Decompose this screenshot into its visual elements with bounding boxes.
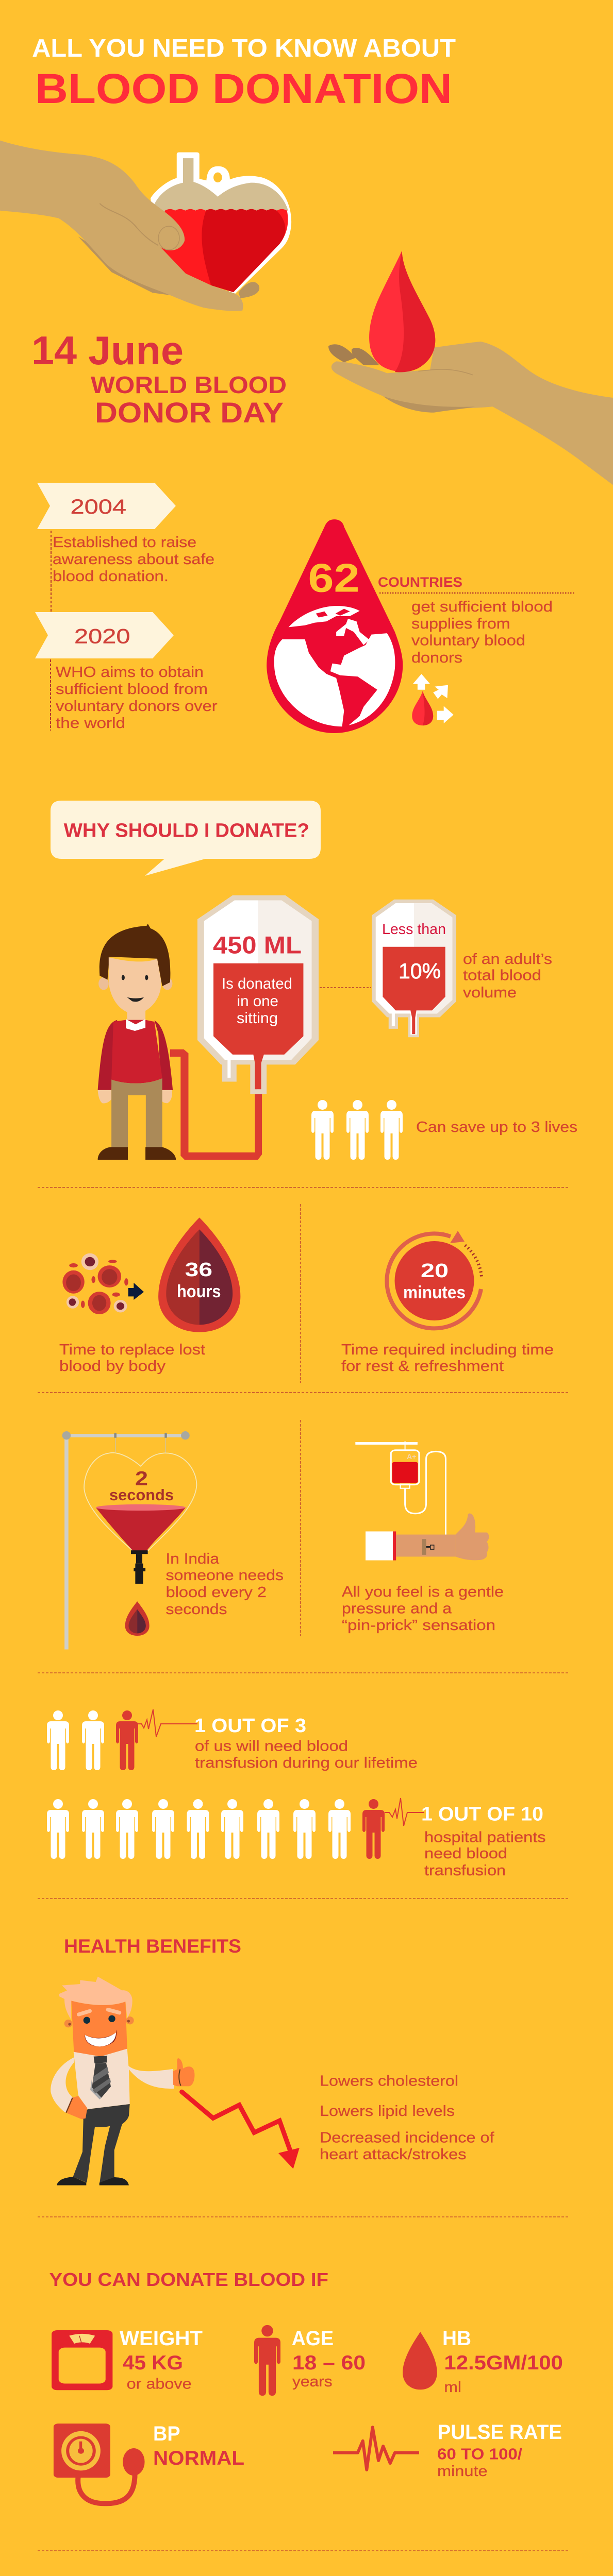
criterion: pulse rate: 60 TO 100/ (437, 2445, 522, 2463)
stat: 1 out of 10: transfusion (424, 1862, 506, 1879)
list: health benefits: heart attack/strokes (320, 2146, 467, 2163)
timeline: 2020 (35, 612, 218, 732)
icon: hb drop (403, 2332, 437, 2389)
criterion: age: 18 – 60 (292, 2352, 366, 2374)
stat: 1 out of 3: 1 OUT OF 3 (194, 1715, 306, 1737)
criterion: hb (442, 2327, 563, 2396)
date heading: WORLD BLOOD (91, 371, 287, 398)
icon: drop with arrows (412, 674, 454, 725)
criterion: hb: ml (444, 2379, 461, 2396)
text: time to replace lost blood: blood by body (59, 1358, 166, 1375)
blood bag: 450 ml: in one (237, 993, 278, 1010)
text: in India someone needs blood: someone needs (166, 1567, 284, 1584)
illustration: hand holding heart-shaped blood bag (0, 141, 291, 311)
stat: 62 countries: get sufficient blood (411, 599, 553, 615)
timeline: 2004: awareness about safe (53, 551, 214, 568)
stat: 1 out of 3: transfusion during our lifetime (195, 1755, 418, 1771)
timeline: 2004: 2004 (70, 496, 126, 518)
list: health benefits: Lowers lipid levels (320, 2103, 455, 2120)
date heading (31, 328, 287, 429)
stat: 62 countries: donors (411, 650, 462, 666)
title: BLOOD DONATION (35, 65, 452, 112)
criterion: age: AGE (292, 2327, 334, 2350)
icon: three people (311, 1100, 403, 1160)
title: ALL YOU NEED TO KNOW ABOUT (32, 35, 456, 62)
text: of an adult's total blood volume: total blood (463, 968, 541, 984)
stat: 62 countries: 62 (308, 555, 360, 601)
date heading: 14 June (31, 328, 184, 373)
text: in India someone needs blood: seconds (166, 1601, 227, 1618)
illustration: donor man (98, 924, 176, 1160)
timeline: 2020: WHO aims to obtain (56, 664, 204, 681)
criterion: weight: 45 KG (123, 2352, 183, 2374)
icon: blood pressure monitor (54, 2424, 145, 2503)
list: health benefits: Decreased incidence of (320, 2130, 495, 2146)
tube connecting man and bag (170, 1049, 262, 1160)
icon row: 1 out of 3 people (47, 1709, 197, 1770)
icon: 20 minutes clock: minutes (403, 1283, 466, 1302)
illustration: arm with drip: A+ (407, 1452, 416, 1461)
criterion: pulse rate: PULSE RATE (438, 2421, 562, 2444)
blood bag: 450 ml: sitting (237, 1010, 278, 1027)
text: of an adult's total blood volume: of an adult’s (463, 951, 552, 968)
criterion: bp: BP (153, 2422, 180, 2445)
blood bag: less than 10%: Less than (382, 921, 446, 938)
timeline: 2004: Established to raise (53, 534, 196, 551)
text: in India someone needs blood: In India (166, 1551, 220, 1567)
connector between bags (320, 987, 371, 988)
illustration: open hand with blood drop (328, 251, 613, 485)
criterion: pulse rate: minute (437, 2463, 488, 2480)
text: time to replace lost blood (59, 1342, 205, 1375)
text: time required (341, 1342, 554, 1375)
criterion: bp: NORMAL (153, 2447, 244, 2469)
list: health benefits: Lowers cholesterol (320, 2073, 458, 2090)
blood bag: 450 ml: Is donated (222, 975, 292, 992)
stat: 1 out of 10: hospital patients (424, 1829, 546, 1845)
stat: 1 out of 3: of us will need blood (195, 1738, 348, 1755)
icon: 20 minutes clock (387, 1231, 482, 1328)
stat: 62 countries: COUNTRIES (378, 574, 462, 590)
text: all you feel: “pin-prick” sensation (342, 1617, 495, 1634)
illustration: IV stand with heart funnel (62, 1431, 196, 1650)
speech bubble: why should I donate: WHY SHOULD I DONATE? (64, 820, 309, 842)
criterion: hb: HB (442, 2327, 471, 2350)
stat: 1 out of 3 (194, 1715, 418, 1771)
icon: globe in blood drop (267, 519, 403, 733)
stat: 1 out of 10 (421, 1804, 546, 1879)
text: can save up to 3 lives: Can save up to 3 lives (416, 1119, 577, 1136)
criterion: pulse rate (437, 2421, 562, 2480)
text: all you feel: pressure and a (342, 1601, 452, 1617)
icon: blood cells with arrow (62, 1253, 144, 1314)
timeline: 2020: voluntary donors over (56, 698, 218, 715)
icon: downward zigzag arrow (182, 2092, 300, 2169)
stat: 62 countries: supplies from (411, 616, 510, 632)
icon row: 1 out of 10 people (47, 1798, 424, 1859)
criterion: weight: WEIGHT (120, 2327, 203, 2350)
blood bag: less than 10%: 10% (399, 959, 441, 983)
timeline: 2020: 2020 (74, 625, 130, 648)
text: time to replace lost blood: Time to replace lost (59, 1342, 205, 1358)
text: time required: Time required including time (341, 1342, 554, 1358)
criterion: bp (153, 2422, 244, 2469)
stat: 62 countries (308, 555, 574, 666)
speech bubble: why should I donate (51, 801, 321, 876)
text: in India someone needs blood (166, 1551, 284, 1618)
text: all you feel: All you feel is a gentle (342, 1584, 504, 1600)
date heading: DONOR DAY (95, 396, 284, 429)
dashed section dividers (38, 1188, 569, 2551)
timeline: 2020: the world (56, 715, 125, 732)
list: health benefits (320, 2073, 495, 2163)
icon: 36 hours drop (158, 1217, 240, 1332)
icon: 36 hours drop: hours (177, 1282, 221, 1301)
illustration: arm with drip (355, 1441, 489, 1561)
text: of an adult's total blood volume (463, 951, 552, 1001)
criterion: hb: 12.5GM/100 (444, 2352, 563, 2374)
criterion: weight (120, 2327, 203, 2393)
blood bag: 450 ml (197, 895, 319, 1094)
stat: 1 out of 10: need blood (424, 1845, 507, 1862)
icon: person age (254, 2325, 280, 2396)
timeline: 2004: blood donation. (53, 568, 169, 585)
criterion: age (292, 2327, 366, 2390)
icon: 36 hours drop: 36 (185, 1259, 212, 1281)
heading: health benefits: HEALTH BENEFITS (64, 1936, 241, 1957)
icon: weighing scale (52, 2330, 112, 2390)
icon: 20 minutes clock: 20 (421, 1260, 449, 1282)
text: all you feel (342, 1584, 504, 1634)
timeline: 2020: sufficient blood from (56, 681, 208, 698)
stat: 1 out of 10: 1 OUT OF 10 (421, 1804, 543, 1825)
icon: pulse line (333, 2427, 419, 2470)
title (32, 35, 456, 112)
text: time required: for rest & refreshment (341, 1358, 504, 1375)
illustration: IV stand with heart funnel: seconds (109, 1486, 174, 1504)
stat: 62 countries: voluntary blood (411, 633, 525, 649)
criterion: age: years (292, 2374, 333, 2390)
text: in India someone needs blood: blood every 2 (166, 1584, 267, 1601)
timeline: 2004 (37, 483, 214, 612)
illustration: businessman thumbs up (51, 1977, 194, 2185)
illustration: IV stand with heart funnel: 2 (135, 1468, 148, 1490)
blood bag: less than 10% (372, 900, 456, 1037)
blood bag: 450 ml: 450 ML (213, 931, 302, 958)
heading: you can donate blood if: YOU CAN DONATE BLOOD IF (49, 2269, 328, 2290)
text: of an adult's total blood volume: volume (463, 985, 517, 1001)
criterion: weight: or above (127, 2376, 192, 2393)
